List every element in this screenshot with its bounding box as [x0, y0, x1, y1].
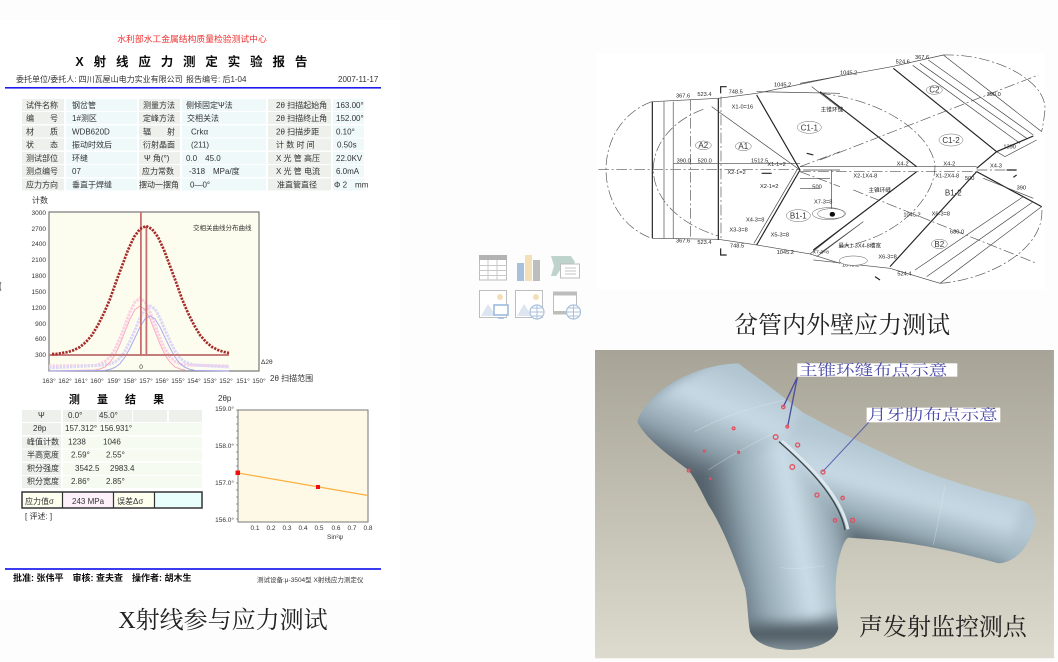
- dimension labels: 523.4: [697, 240, 711, 246]
- report issuer heading: 水利部水工金属结构质量检验测试中心: [117, 33, 267, 44]
- y axis labels: 900: [35, 321, 46, 328]
- dimension labels: 367.6: [676, 239, 690, 245]
- icon: video: [553, 292, 580, 319]
- total intensity curve: [52, 226, 229, 354]
- dimension labels: 1390: [1003, 144, 1016, 150]
- report title: X 射 线 应 力 测 定 实 验 报 告: [75, 54, 311, 69]
- dimension labels: 390.0: [987, 92, 1001, 98]
- x axis labels: 154°: [187, 377, 201, 385]
- y axis labels: [32, 210, 46, 359]
- edge mark left: [0, 282, 1, 291]
- dimension labels: 523.4: [697, 92, 711, 98]
- dimension labels: X1-1=2: [767, 162, 786, 168]
- client information line: [16, 74, 379, 84]
- specimen parameter table: Crkα: [191, 128, 208, 136]
- delta two theta label: Δ2θ: [261, 359, 273, 366]
- section labels: B1-1: [790, 212, 807, 221]
- callout: crescent rib points: [823, 406, 1000, 472]
- specimen parameter table: 0.0 45.0: [186, 154, 221, 163]
- x axis labels: 150°: [252, 377, 266, 385]
- chart caption: 交相关曲线分布曲线: [193, 223, 252, 232]
- x axis labels: 0.5: [314, 525, 324, 532]
- measurement results table: Ψ: [38, 411, 45, 420]
- fit line: [238, 473, 368, 496]
- section labels: C2: [929, 86, 940, 95]
- specimen parameter table: [22, 99, 369, 190]
- specimen parameter table: 2θ 扫描起始角: [276, 100, 327, 110]
- y axis labels: 156.0°: [215, 516, 234, 524]
- left half of drawing: [598, 76, 846, 263]
- y axis labels: 159.0°: [215, 405, 234, 413]
- specimen parameter table: -318 MPa/度: [189, 166, 240, 176]
- caption: inner and outer wall stress: 岔管内外壁应力测试: [734, 312, 950, 339]
- specimen parameter table: 交相关法: [187, 113, 219, 123]
- x axis labels: 161°: [74, 377, 88, 385]
- dimension labels: X2-1=2: [727, 170, 746, 176]
- x axis labels: 153°: [203, 377, 217, 385]
- dimension labels: 520.0: [698, 159, 712, 165]
- section labels: C1-1: [801, 123, 819, 132]
- dimension labels: 524.4: [897, 271, 911, 277]
- x axis labels: 155°: [171, 377, 185, 385]
- x axis labels: 157°: [139, 377, 153, 385]
- measurement results table: 45.0°: [99, 411, 118, 420]
- specimen parameter table: 6.0mA: [336, 167, 360, 176]
- icon: table: [479, 255, 507, 280]
- dimension labels: X5-3=8: [771, 233, 789, 239]
- photo background: [595, 350, 1054, 658]
- dimension labels: 390.0: [677, 159, 691, 165]
- pink fitted curve: [49, 306, 185, 371]
- specimen parameter table: X 光 管 电流: [276, 166, 320, 176]
- y axis title: 2θp: [218, 394, 232, 403]
- data points: [236, 470, 240, 475]
- y axis title: 计数: [32, 195, 48, 205]
- y axis labels: 2100: [32, 257, 46, 264]
- background line: [49, 354, 229, 356]
- x axis labels: 151°: [236, 377, 250, 385]
- y axis ticks: [236, 410, 238, 519]
- plot area: [49, 212, 259, 371]
- dimension labels: X6-3=8: [878, 254, 897, 260]
- specimen parameter table: 163.00°: [336, 101, 364, 110]
- dimension labels: X1-2X4-8: [935, 173, 959, 179]
- icon: smartart: [551, 256, 580, 278]
- measurement results table: 积分宽度: [27, 476, 59, 486]
- measurement results table: 156.931°: [100, 424, 132, 433]
- seam rib: [782, 441, 848, 529]
- x axis labels: 160°: [90, 377, 104, 385]
- dimension labels: 1045.2: [840, 71, 857, 77]
- measurement results table: 2.85°: [106, 477, 125, 486]
- measurement results table: 3542.5: [75, 464, 100, 473]
- x axis labels: [250, 525, 373, 532]
- dimension labels: X2-1=2: [760, 184, 778, 190]
- dimension labels: 最大1-3X4-8槽宽: [838, 241, 881, 249]
- y axis labels: 600: [35, 336, 46, 343]
- specimen parameter table: 编 号: [26, 113, 58, 123]
- measurement results table: 157.312°: [65, 424, 97, 433]
- test equipment note: 测试设备:μ-3504型 X射线应力测定仪: [257, 575, 364, 584]
- measurement results table: 0.0°: [68, 411, 82, 420]
- specimen parameter table: 准直管直径: [277, 180, 317, 190]
- specimen parameter table: Ψ 角(°): [144, 153, 170, 163]
- zero marker: 0: [139, 364, 143, 371]
- dimension labels: 500: [965, 176, 974, 182]
- specimen parameter table: 侧倾固定Ψ法: [186, 100, 233, 110]
- y axis labels: [215, 405, 234, 524]
- y axis labels: 158.0°: [215, 442, 234, 450]
- specimen parameter table: Φ 2 mm: [334, 180, 369, 190]
- blue fitted curve: [49, 316, 229, 371]
- specimen parameter table: 辐 射: [143, 126, 175, 136]
- section labels: A2: [698, 141, 709, 150]
- specimen parameter table: 测量方法: [143, 100, 175, 110]
- peak marker lines: [140, 212, 147, 356]
- dimension labels: 1045.2: [774, 83, 791, 89]
- client information line: 报告编号: 后1-04: [186, 74, 247, 84]
- right half of drawing: [800, 55, 1045, 283]
- specimen parameter table: 0.10°: [336, 128, 355, 136]
- caption: X-ray test: X射线参与应力测试: [118, 607, 328, 634]
- stress value box: 误差Δσ: [117, 496, 143, 506]
- caption: acoustic emission: 声发射监控测点: [859, 614, 1028, 641]
- measurement results table: [22, 410, 202, 488]
- specimen parameter table: 测试部位: [26, 153, 58, 163]
- specimen parameter table: 状 态: [26, 140, 58, 150]
- specimen parameter table: 振动时效后: [72, 140, 112, 150]
- measurement results table: 2.86°: [71, 477, 90, 486]
- diffraction peak chart: [32, 195, 313, 385]
- dimension labels: 1045.2: [777, 250, 794, 256]
- specimen parameter table: 22.0KV: [336, 154, 363, 163]
- header rule: [5, 87, 381, 89]
- icon: picture: [480, 290, 508, 318]
- measurement results table: 1238: [68, 438, 86, 446]
- dimension labels: X6-3=8: [932, 212, 950, 218]
- dimension labels: 1512.5: [751, 159, 768, 165]
- x axis labels: 0.1: [250, 525, 260, 532]
- dimension labels: X4-2: [897, 161, 909, 167]
- dimension labels: X7-3=8: [813, 249, 829, 255]
- section labels: [926, 86, 963, 249]
- measurement results table: 2θp: [33, 424, 47, 433]
- client information line: 2007-11-17: [338, 75, 379, 84]
- measurement results table: 峰值计数: [27, 436, 59, 446]
- specimen parameter table: 衍射晶面: [143, 140, 175, 150]
- dimension labels: [676, 83, 844, 256]
- dimension labels: 主锥环缝: [821, 105, 844, 113]
- x axis labels: 163°: [42, 377, 56, 385]
- blob symbol: [818, 209, 846, 219]
- measurement results heading: 测 量 结 果: [69, 392, 171, 406]
- dimension labels: X1-0=16: [732, 104, 753, 110]
- specimen parameter table: 应力方向: [26, 180, 58, 190]
- measurement results table: 半高宽度: [27, 450, 59, 460]
- panel: bifurcated pipe engineering drawing: [597, 53, 1045, 290]
- content placeholder icons: [479, 255, 580, 319]
- icon: online picture: [516, 290, 544, 319]
- client information line: 委托单位/委托人: 四川瓦屋山电力实业有限公司: [16, 74, 183, 84]
- y axis labels: 1200: [32, 305, 46, 312]
- dimension labels: 680.0: [950, 229, 964, 235]
- specimen parameter table: WDB620D: [72, 128, 110, 136]
- specimen parameter table: 1#测区: [72, 114, 97, 123]
- approval signatures: 批准: 张伟平 审核: 查夫查 操作者: 胡木生: [13, 572, 192, 583]
- specimen parameter table: 2θ 扫描步距: [276, 126, 319, 136]
- x axis labels: 152°: [219, 377, 233, 385]
- stress value box: [22, 492, 202, 508]
- bifurcated pipe 3D model: [638, 364, 1035, 650]
- dimension labels: 1045.2: [903, 213, 921, 219]
- faint weld seams: [695, 400, 945, 568]
- y axis labels: 1800: [32, 273, 46, 280]
- x axis labels: 0.2: [266, 525, 276, 532]
- x axis labels: 158°: [123, 377, 137, 385]
- x axis labels: 156°: [155, 377, 169, 385]
- section labels: B2: [934, 240, 945, 249]
- x axis labels: 159°: [107, 377, 121, 385]
- y axis labels: 2400: [32, 241, 46, 248]
- section labels: [695, 121, 821, 222]
- lavender raw data markers: [49, 306, 229, 368]
- dimension labels: 1045.2: [842, 263, 859, 269]
- dimension labels: 500: [812, 185, 822, 191]
- x axis title: Sin²ψ: [327, 534, 344, 541]
- x axis labels: 0.8: [363, 525, 373, 532]
- dimension labels: X3-3=8: [729, 228, 748, 234]
- specimen parameter table: 垂直于焊缝: [72, 180, 112, 190]
- dimension labels: [838, 55, 1026, 277]
- section labels: A1: [738, 142, 749, 151]
- y axis labels: 2700: [32, 226, 46, 233]
- dimension labels: 524.6: [896, 59, 910, 65]
- specimen parameter table: 0—0°: [190, 180, 210, 190]
- dimension labels: 367.6: [676, 94, 690, 100]
- callout: crescent rib points: 月牙肋布点示意: [868, 406, 998, 424]
- y axis labels: 157.0°: [215, 479, 234, 487]
- icon: bar chart: [517, 255, 540, 281]
- dimension labels: X4-2: [943, 161, 955, 167]
- specimen parameter table: 计 数 时 间: [276, 140, 315, 150]
- specimen parameter table: X 光 管 高压: [276, 153, 320, 163]
- y axis labels: 300: [35, 352, 46, 359]
- callout: main cone seam points: 主锥环缝布点示意: [799, 361, 948, 379]
- dimension labels: 748.5: [729, 89, 743, 95]
- section labels: B1-2: [945, 189, 962, 198]
- x axis labels: 0.3: [282, 525, 292, 532]
- y axis labels: 1500: [32, 289, 46, 296]
- specimen parameter table: 定峰方法: [143, 113, 175, 123]
- measurement results table: 2.55°: [106, 450, 125, 460]
- dimension labels: 748.5: [730, 243, 744, 249]
- monitoring point markers: [687, 405, 855, 522]
- specimen parameter table: 07: [72, 167, 81, 176]
- measurement results table: 积分强度: [27, 463, 59, 473]
- x axis title: 2θ 扫描范围: [270, 373, 313, 383]
- y axis labels: 3000: [32, 210, 46, 217]
- remarks label: [ 评述: ]: [25, 511, 52, 521]
- measurement results table: 1046: [103, 438, 121, 446]
- x axis labels: 0.7: [347, 525, 357, 532]
- stress value box: 应力值σ: [25, 496, 54, 506]
- specimen parameter table: 环缝: [72, 153, 88, 163]
- dimension labels: X4-3=8: [746, 217, 764, 223]
- callout: main cone seam points: [783, 361, 957, 427]
- stress regression chart: [215, 394, 373, 541]
- dimension labels: X7-3=8: [814, 199, 832, 205]
- stress value box: 243 MPa: [72, 497, 105, 506]
- specimen parameter table: 试件名称: [26, 100, 58, 110]
- x axis labels: 0.6: [331, 525, 341, 532]
- specimen parameter table: 测点编号: [26, 166, 58, 176]
- pink raw data markers: [49, 298, 229, 366]
- panel: acoustic emission monitoring points: [595, 345, 1055, 662]
- dimension labels: X2-1X4-8: [853, 174, 877, 180]
- specimen parameter table: 钢岔管: [72, 100, 96, 110]
- x axis labels: 162°: [58, 377, 72, 385]
- measurement results table: 2.59°: [71, 450, 90, 460]
- specimen parameter table: 2θ 扫描终止角: [276, 113, 327, 123]
- blob symbol: [839, 256, 867, 265]
- specimen parameter table: 材 质: [26, 126, 58, 136]
- panel: X-ray stress test report: [5, 33, 381, 584]
- dimension labels: 367.6: [915, 55, 929, 61]
- regression plot area: [238, 410, 368, 522]
- dimension labels: 390: [1017, 185, 1026, 191]
- specimen parameter table: 应力常数: [142, 166, 174, 176]
- measurement results table: 2983.4: [110, 464, 135, 473]
- specimen parameter table: 摆动一摆角: [139, 180, 179, 190]
- x axis labels: [42, 377, 266, 385]
- specimen parameter table: (211): [191, 140, 209, 150]
- x axis labels: 0.4: [298, 525, 308, 532]
- dimension labels: 主锥环缝: [868, 186, 891, 194]
- section labels: C1-2: [942, 136, 960, 145]
- dimension labels: X4-3: [990, 164, 1002, 170]
- footer rule: [5, 568, 381, 570]
- specimen parameter table: 152.00°: [336, 114, 364, 123]
- specimen parameter table: 0.50s: [337, 140, 357, 150]
